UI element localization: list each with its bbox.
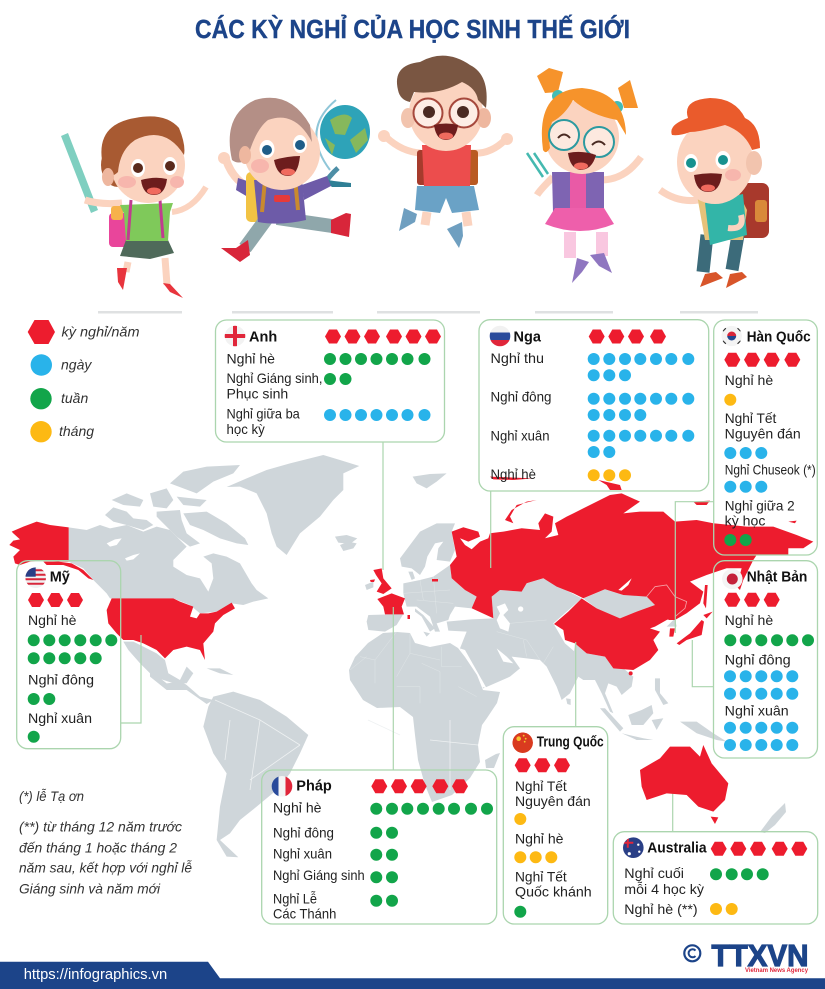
row labels: Nghỉ đông <box>273 824 334 840</box>
row labels <box>515 778 592 900</box>
legend: weeks: tuần <box>61 390 88 406</box>
website url: https://infographics.vn <box>24 966 167 983</box>
panel: Pháp <box>262 770 497 924</box>
row labels: Nghỉ giữa 2 <box>725 498 795 514</box>
flag: USA <box>25 567 47 589</box>
footnotes: đến tháng 1 hoặc tháng 2 <box>19 839 177 855</box>
panel: Nga <box>479 320 709 491</box>
flag: Japan <box>722 569 743 589</box>
row labels: Nghỉ Tết <box>515 778 567 794</box>
holidays per year <box>724 593 780 607</box>
wordmark: TTXVN <box>712 938 808 973</box>
footnotes: năm sau, kết hợp với nghỉ lễ <box>19 860 192 876</box>
row labels: Nghỉ hè <box>515 830 564 846</box>
holidays per year <box>724 353 800 367</box>
row labels: Nghỉ hè <box>226 350 275 366</box>
country borders <box>215 577 553 790</box>
heading: Australia <box>647 840 707 856</box>
holidays per year <box>28 593 83 607</box>
flag: France <box>272 776 292 796</box>
legend: months: tháng <box>59 423 94 439</box>
gray landmasses: North America <box>69 455 447 683</box>
row labels: kỳ học <box>725 513 765 529</box>
row labels: Nghỉ giữa ba <box>226 406 300 422</box>
dots <box>324 353 430 421</box>
logo: TTXVN <box>684 938 808 974</box>
gray landmasses: Europe, Middle East and West Asia <box>340 523 600 705</box>
row labels: mỗi 4 học kỳ <box>624 881 704 897</box>
Kaliningrad <box>432 579 438 582</box>
China, Koreas and Japan <box>554 585 713 675</box>
gray landmasses: Africa <box>349 632 786 833</box>
gray landmasses: Central and South America <box>150 668 308 857</box>
row labels: Nghỉ Tết <box>725 410 776 426</box>
dots <box>28 634 117 743</box>
row labels: Nghỉ hè <box>725 612 773 628</box>
panel: Mỹ <box>17 561 121 749</box>
flag: China <box>512 732 533 753</box>
legend <box>28 320 140 442</box>
inland seas <box>460 603 523 688</box>
holidays per year <box>711 842 807 856</box>
row labels: Nghỉ Giáng sinh, <box>226 370 322 386</box>
holidays per year <box>515 758 570 772</box>
row labels <box>725 612 791 718</box>
row labels: Nghỉ xuân <box>490 428 550 444</box>
row labels: học kỳ <box>226 421 265 437</box>
ground shadows <box>98 311 758 314</box>
footer band <box>0 962 825 989</box>
kid 1: girl with ruler <box>61 116 206 298</box>
kid 2: child with globe <box>218 98 370 262</box>
legend: days: ngày <box>61 356 92 372</box>
heading: Hàn Quốc <box>747 330 811 346</box>
gray landmasses: Southeast Asia and Oceania <box>573 589 727 742</box>
kids illustration <box>61 56 769 313</box>
heading: Mỹ <box>50 570 70 586</box>
connector lines <box>121 442 714 832</box>
dots <box>588 353 694 481</box>
Alaska <box>9 522 69 565</box>
row labels <box>28 612 94 726</box>
row labels <box>725 372 816 529</box>
row labels: Nghỉ đông <box>725 652 791 668</box>
row labels: Phục sinh <box>226 386 288 402</box>
row labels: Nguyên đán <box>515 793 591 809</box>
Russia <box>450 477 813 620</box>
holidays per year <box>589 330 666 344</box>
lakes in Canada <box>107 538 140 561</box>
holidays per year <box>371 779 468 793</box>
kid 5: boy with book <box>660 98 769 288</box>
row labels: Nghỉ đông <box>490 389 552 405</box>
Corsica <box>408 615 410 619</box>
Alaska panhandle <box>43 562 93 580</box>
holidays per year <box>325 330 441 344</box>
Baikal and Russia-China border <box>618 578 687 617</box>
row labels: Các Thánh <box>273 906 336 922</box>
footnotes: (*) lễ Tạ ơn <box>19 788 84 804</box>
flag: South Korea <box>721 326 742 346</box>
row labels: Nghỉ xuân <box>28 710 92 726</box>
countries highlighted in red <box>9 477 813 675</box>
panel: Nhật Bản <box>714 561 818 758</box>
footnotes: Giáng sinh và năm mới <box>19 880 161 896</box>
row labels: Quốc khánh <box>515 884 592 900</box>
dots <box>514 813 557 918</box>
Australia landmass <box>640 745 728 824</box>
flag: England <box>224 325 246 347</box>
row labels <box>226 350 322 437</box>
kid 4: girl with pigtails <box>527 68 641 283</box>
legend: holidays per year: kỳ nghỉ/năm <box>62 324 140 340</box>
heading: Nhật Bản <box>747 570 807 586</box>
panel: Trung Quốc <box>503 727 608 924</box>
United Kingdom <box>370 568 392 594</box>
row labels <box>624 865 704 917</box>
panel: Hàn Quốc <box>714 320 817 555</box>
heading: Nga <box>514 330 542 346</box>
kid 3: boy with glasses <box>378 56 513 248</box>
panel: Australia <box>613 832 818 924</box>
row labels <box>490 350 552 482</box>
heading: Pháp <box>296 779 332 795</box>
panel: Anh <box>216 320 444 442</box>
flag: Russia <box>490 326 510 346</box>
copyright mark <box>684 945 700 961</box>
row labels: Nghỉ xuân <box>725 702 789 718</box>
row labels: Nghỉ hè <box>490 466 536 482</box>
France <box>377 593 405 614</box>
row labels: Nghỉ Tết <box>515 868 567 884</box>
row labels: Nghỉ Lễ <box>273 890 317 906</box>
row labels: Nghỉ hè <box>28 612 77 628</box>
row labels: Nghỉ cuối <box>624 865 684 881</box>
row labels: Nghỉ hè <box>725 372 773 388</box>
world map <box>9 455 813 857</box>
agency name: Vietnam News Agency <box>745 967 808 974</box>
row labels: Nguyên đán <box>725 426 801 442</box>
dots <box>710 868 769 915</box>
row labels: Nghỉ thu <box>490 350 544 366</box>
United States <box>107 598 235 660</box>
title: CÁC KỲ NGHỈ CỦA HỌC SINH THẾ GIỚI <box>195 13 630 44</box>
dots <box>724 634 814 751</box>
dots <box>724 394 767 546</box>
row labels: Nghỉ hè <box>273 800 322 816</box>
footnotes <box>19 788 192 896</box>
row labels: Nghỉ Giáng sinh <box>273 867 365 883</box>
row labels: Nghỉ đông <box>28 671 94 687</box>
row labels <box>273 800 365 922</box>
row labels: Nghỉ xuân <box>273 846 332 862</box>
flag: Australia <box>622 837 644 859</box>
heading: Anh <box>249 330 277 346</box>
dots <box>370 803 493 907</box>
footnotes: (**) từ tháng 12 năm trước <box>19 819 182 835</box>
row labels: Nghỉ hè (**) <box>624 901 698 917</box>
heading: Trung Quốc <box>537 735 604 751</box>
